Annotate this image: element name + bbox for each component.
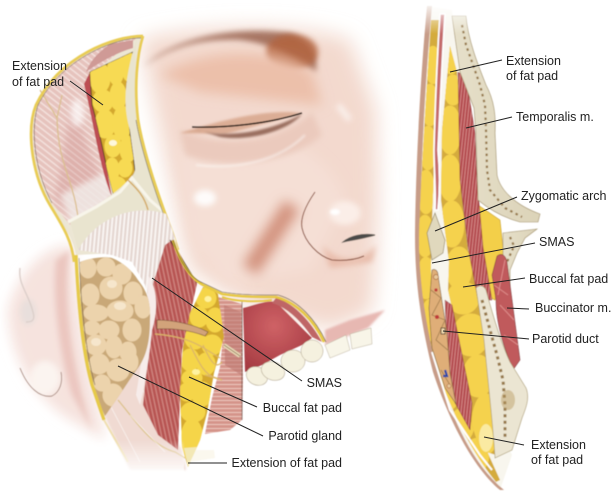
temporal muscle [33, 38, 137, 225]
panel: temporal dissection window [31, 35, 178, 262]
label: extension of fat pad (left, bottom): Extension of fat pad [232, 456, 342, 470]
deep fat pad column [440, 46, 499, 455]
label: extension of fat pad (right, top): Extension [506, 54, 561, 68]
parotid gland [76, 255, 150, 462]
superficial fat column [417, 20, 500, 482]
temporalis muscle [458, 72, 492, 300]
bottom fade [60, 440, 184, 476]
yellow SMAS lip edge [173, 240, 326, 342]
nerve branches [40, 90, 82, 240]
parotid section [429, 269, 456, 404]
yellow fat behind temporalis [478, 205, 504, 300]
label: SMAS (right): SMAS [539, 235, 574, 249]
label: buccal fat pad (right): Buccal fat pad [529, 272, 608, 286]
label: extension of fat pad (right, bottom): Extension [531, 438, 586, 452]
yellow SMAS outline [31, 36, 178, 262]
label: extension of fat pad (left, top): Extension [12, 59, 67, 73]
masseter muscle [445, 300, 472, 430]
leader lines [70, 60, 535, 463]
label: extension of fat pad (right, bottom): of fat pad [531, 453, 583, 467]
label: buccal fat pad (left): Buccal fat pad [263, 401, 342, 415]
buccinator muscle [492, 254, 520, 370]
zygomatic arch section [427, 213, 445, 260]
superficial thin muscle strip [434, 14, 445, 210]
panel: buccinator muscle [205, 297, 243, 434]
figure: vertical section [410, 0, 540, 490]
icon: ear [20, 268, 62, 396]
parotid duct and nerves [155, 320, 240, 380]
lower lip [325, 310, 385, 345]
extension of fat pad yellow [90, 52, 135, 196]
label: SMAS (left): SMAS [307, 376, 342, 390]
temporal bone [452, 16, 540, 295]
icon: closed eye [180, 112, 302, 138]
skin layer [415, 6, 504, 490]
icon: nose [302, 192, 375, 260]
figure: lateral face dissection [8, 27, 385, 476]
label: extension of fat pad (left, top): of fat pad [12, 75, 64, 89]
top fade [410, 0, 480, 34]
buccal fat pad [180, 287, 224, 467]
mandible [476, 286, 528, 458]
white base fascia [415, 6, 512, 490]
label: zygomatic arch: Zygomatic arch [521, 189, 606, 203]
label: parotid gland: Parotid gland [268, 429, 342, 443]
mouth interior and teeth [243, 301, 372, 389]
fascia band [70, 38, 178, 250]
skin: neck [8, 245, 105, 440]
label: extension of fat pad (right, top): of fat pad [506, 69, 558, 83]
panel: pale platysma and SMAS fibres [78, 210, 197, 470]
label: temporalis muscle: Temporalis m. [516, 110, 594, 124]
label: buccinator muscle: Buccinator m. [535, 301, 611, 315]
label: parotid duct: Parotid duct [532, 332, 599, 346]
skin: face [140, 27, 378, 330]
